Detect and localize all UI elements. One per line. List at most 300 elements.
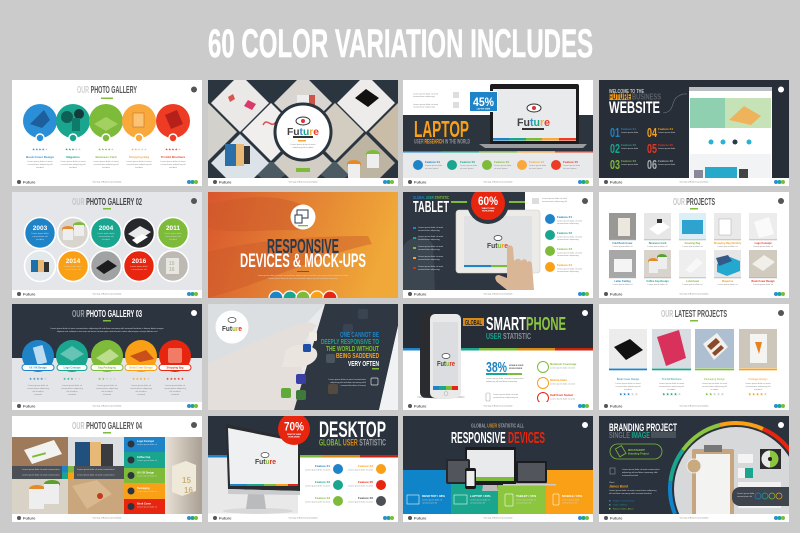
future business line: FUTURE xyxy=(609,92,631,102)
pills xyxy=(22,364,191,370)
panel: our photo gallery xyxy=(12,80,202,186)
features: Lorem ipsum dolor sit amet xyxy=(348,500,373,504)
footer xyxy=(17,180,198,184)
years: 2003 xyxy=(33,225,48,232)
phone mock-up: Future xyxy=(437,361,455,368)
years: 2004 xyxy=(99,225,114,232)
global tag xyxy=(463,318,484,327)
project captions: Lorem ipsum dolor sit xyxy=(648,283,668,286)
colour strip xyxy=(403,348,593,350)
device captions: DESKTOP / 38% xyxy=(422,494,445,498)
device captions: LAPTOP / 26% xyxy=(470,494,491,498)
project text: consectetuer adipiscing elit xyxy=(702,385,727,388)
item text: tincidunt xyxy=(135,166,143,169)
footer: Your logo of Business presentation xyxy=(483,292,513,296)
divider xyxy=(297,271,309,272)
device icon xyxy=(290,204,316,230)
bullet list: consectetuer adipiscing xyxy=(418,238,441,241)
item text: consectetuer adipiscing xyxy=(96,387,119,390)
green connectors xyxy=(451,201,525,203)
bullet list: Lorem ipsum dolor sit amet xyxy=(418,235,443,238)
footer: Future xyxy=(23,292,36,296)
item text: tincidunt xyxy=(36,166,44,169)
close button xyxy=(582,422,588,428)
footer: Your logo of Business presentation xyxy=(92,292,122,296)
bullet list: Lorem ipsum dolor sit amet xyxy=(418,265,443,268)
numbered features xyxy=(610,128,657,169)
features: Lorem ipsum dolor sit amet xyxy=(557,252,582,254)
year text: tincidunt xyxy=(169,238,177,241)
features: consectetuer adipiscing xyxy=(557,254,580,257)
project captions: Lorem ipsum dolor sit xyxy=(683,245,703,248)
sub text xyxy=(258,274,349,280)
contact: Twitter: @Name xyxy=(613,504,628,506)
year text: Lorem ipsum dolor xyxy=(64,265,82,268)
project text: Lorem ipsum dolor sit amet xyxy=(702,382,727,385)
footer: Your logo of Business presentation xyxy=(679,404,709,408)
item text: euismod xyxy=(34,394,43,396)
project text: Lorem ipsum dolor sit amet xyxy=(615,382,641,385)
item text: consectetuer adipiscing xyxy=(61,387,84,390)
dark band xyxy=(403,304,593,348)
item text xyxy=(27,384,187,396)
intro text xyxy=(50,327,164,333)
year text: consectetuer elit xyxy=(65,268,81,271)
panel: tablet xyxy=(403,182,593,298)
item text: Lorem ipsum dolor sit xyxy=(131,384,151,387)
features: consectetuer adipiscing xyxy=(557,238,580,241)
client xyxy=(609,481,657,495)
monitor mock-up xyxy=(223,424,300,514)
ratings: ★★★★★ xyxy=(32,148,49,152)
desktop heading: DESKTOP xyxy=(319,417,386,442)
item labels: Book Cover Design xyxy=(26,155,54,159)
thumbnail bases xyxy=(609,240,777,278)
bullet list: consectetuer adipiscing xyxy=(418,248,441,251)
footer: Your logo of Business presentation xyxy=(679,516,709,520)
ratings: ★★★★★ xyxy=(165,148,182,152)
colour stack: Coffee Cup xyxy=(137,456,151,459)
footer: Future xyxy=(23,516,36,520)
year text: tincidunt xyxy=(36,238,44,241)
feature text: Feature 05 xyxy=(658,143,673,147)
item text: Lorem ipsum dolor sit xyxy=(28,384,48,387)
ratings xyxy=(32,148,180,150)
pill labels: Bag Packaging xyxy=(98,366,116,370)
laptop heading: LAPTOP xyxy=(414,116,469,142)
ring and mock-ups: Lorem ipsum dolor xyxy=(737,492,755,495)
feature text: Feature 01 xyxy=(621,127,636,131)
footer: Your logo of Business presentation xyxy=(92,516,122,520)
device captions: TABLET / 15% xyxy=(516,494,536,498)
feature text: Lorem ipsum dolor xyxy=(658,163,676,166)
quote: DEEPLY RESPONSIVE TO xyxy=(321,337,379,346)
top notes: Lorem ipsum dolor sit amet xyxy=(413,103,438,106)
top notes: consectetuer adipiscing xyxy=(413,95,436,98)
note icon xyxy=(371,378,378,385)
note xyxy=(610,468,660,477)
panel: our latest projects xyxy=(599,304,789,410)
sub-heading: SINGLE IMAGE xyxy=(609,431,650,440)
item text: elit tincidunt xyxy=(33,390,44,393)
project text: Lorem ipsum dolor sit amet xyxy=(745,382,771,385)
item text: consectetuer adipiscing xyxy=(27,387,50,390)
item text: elit tincidunt xyxy=(67,390,78,393)
red 70% badge: WORLDWIDE xyxy=(288,436,301,438)
footer xyxy=(12,514,202,522)
footer: Your logo of Business presentation xyxy=(483,516,513,520)
features xyxy=(545,214,582,273)
tablet mock-up xyxy=(456,210,540,273)
footer: Your logo of Business presentation xyxy=(288,180,318,184)
red 60% badge xyxy=(467,182,509,224)
sub-heading: GLOBAL USER STATISTIC xyxy=(319,438,386,448)
lower band xyxy=(403,152,593,179)
project captions: Lorem ipsum dolor sit xyxy=(683,283,703,286)
photo tiles: 16 xyxy=(184,486,193,495)
device captions: MOBILE / 08% xyxy=(562,494,583,498)
features: Lorem ipsum dolor sit amet xyxy=(557,220,582,222)
feature row: sit amet ipsum xyxy=(529,167,543,170)
colour dots xyxy=(103,320,111,322)
stats list: Mobile Data xyxy=(550,378,567,382)
footer xyxy=(403,178,593,184)
38% stat: 38% xyxy=(486,359,507,376)
footer xyxy=(599,178,789,186)
item text: elit tincidunt xyxy=(102,390,113,393)
item text: consectetuer adipiscing xyxy=(130,387,153,390)
heading: OUR PHOTO GALLERY xyxy=(77,85,137,96)
project captions: Lorem ipsum dolor sit xyxy=(753,245,773,248)
tablet heading: TABLET xyxy=(413,199,449,216)
tile contents xyxy=(225,89,380,178)
project text: consectetuer adipiscing elit xyxy=(746,385,771,388)
bullet list: Lorem ipsum dolor sit amet xyxy=(418,255,443,258)
feature row: Lorem ipsum dolor xyxy=(460,164,478,167)
features: Feature 02 xyxy=(315,480,330,484)
item text: Lorem ipsum dolor sit xyxy=(62,384,82,387)
feature text: Lorem ipsum dolor xyxy=(621,147,639,150)
footer: Your logo of Business presentation xyxy=(679,292,709,296)
badge 45%: LAPTOP USER xyxy=(477,108,491,110)
feature text: Lorem ipsum dolor xyxy=(658,147,676,150)
logo disc xyxy=(275,104,331,160)
numbered features: 04 xyxy=(647,125,658,140)
feature row: Lorem ipsum dolor xyxy=(529,164,547,167)
features: Lorem ipsum dolor sit amet xyxy=(557,236,582,238)
item text: Lorem ipsum dolor sit xyxy=(165,384,185,387)
quote: BEING SADDENED xyxy=(336,351,379,360)
item text: elit tincidunt xyxy=(136,390,147,393)
dark left panel xyxy=(403,192,525,290)
38% stat: MOBILE USER xyxy=(509,365,524,367)
dark band xyxy=(208,416,398,455)
caption strip xyxy=(12,466,124,479)
close button xyxy=(778,310,784,316)
ratings: ★★★★★ xyxy=(29,377,48,381)
years: 2016 xyxy=(132,258,147,265)
close button xyxy=(191,422,197,428)
circle images: 16 xyxy=(169,267,175,273)
item text: tincidunt xyxy=(102,166,110,169)
laptop mock-up: Future xyxy=(517,117,550,129)
item text: euismod xyxy=(137,394,146,396)
project captions: Lorem ipsum dolor sit xyxy=(613,245,633,248)
feature row: Lorem ipsum dolor xyxy=(563,164,581,167)
year text: tincidunt xyxy=(102,238,110,241)
colour stack: Logo Concept xyxy=(137,440,154,443)
features: Lorem ipsum dolor sit amet xyxy=(305,484,330,488)
item text: Lorem ipsum dolor sit xyxy=(97,384,117,387)
image circles xyxy=(22,340,191,372)
red 60% badge: TABLET USER xyxy=(481,207,495,210)
device captions: consectetuer elit xyxy=(470,502,486,504)
item text: Lorem ipsum dolor sit amet xyxy=(60,160,86,163)
item text: euismod xyxy=(171,394,180,396)
hand shape xyxy=(208,197,372,298)
item text: consectetuer adipiscing elit xyxy=(61,163,86,166)
client: Client xyxy=(609,481,615,484)
dark top xyxy=(12,304,202,358)
footer: Your logo of Business presentation xyxy=(92,404,122,408)
project text: tincidunt xyxy=(754,388,762,391)
year text: Lorem ipsum dolor xyxy=(130,265,148,268)
footer: Future xyxy=(610,292,623,296)
colour stack xyxy=(124,437,165,514)
red 70% badge: DESKTOP USER xyxy=(287,434,302,436)
project labels: Book Cover Design xyxy=(617,377,640,381)
note: euismod tincidunt xyxy=(622,474,639,477)
colour bars xyxy=(609,368,777,370)
quote xyxy=(321,330,379,368)
years xyxy=(33,225,180,265)
phone photo wedge xyxy=(294,304,398,410)
device captions: consectetuer elit xyxy=(562,502,578,504)
photo tiles xyxy=(12,437,202,514)
logo disc: Future xyxy=(287,127,319,138)
feature text xyxy=(621,127,676,166)
sub text: Lorem ipsum dolor sit amet consectetuer adipiscing elit sed diam nonummy xyxy=(268,277,339,280)
caption strip: Lorem ipsum dolor sit amet consectetuer xyxy=(22,474,60,476)
device captions: Lorem ipsum dolor sit xyxy=(422,498,442,502)
footer xyxy=(403,514,593,522)
colour stack: Lorem ipsum dolor sit xyxy=(137,443,157,446)
project labels: Business Card xyxy=(649,242,667,245)
38% stat: WORLDWIDE xyxy=(509,368,523,370)
stats list: Lorem ipsum dolor sit amet xyxy=(550,382,575,386)
year text xyxy=(31,232,182,271)
pill labels: Logo Concept xyxy=(64,366,81,370)
project captions: Lorem ipsum dolor sit xyxy=(613,283,633,286)
bullet list xyxy=(413,226,443,271)
years: 2014 xyxy=(66,258,81,265)
close button xyxy=(778,422,784,428)
welcome text: WELCOME TO THE xyxy=(609,89,644,95)
panel: responsive devices xyxy=(403,416,593,522)
pill labels: Book Cover Design xyxy=(129,366,153,370)
note: adipiscing elit sed diam nonummy nibh xyxy=(622,471,659,474)
sub text: Lorem ipsum dolor sit amet consectetuer adipiscing elit sed diam nonummy nibh euismod tincidunt xyxy=(258,274,349,277)
panel: diamond mock-up gallery xyxy=(208,80,398,186)
colour stack: UI / UX Design xyxy=(137,472,155,474)
numbered features: 03 xyxy=(610,157,620,172)
photo tiles: 15 xyxy=(182,476,191,485)
project labels: Fold Book Cover xyxy=(612,242,633,245)
circle images: 15 xyxy=(169,261,175,267)
panel: our projects xyxy=(599,192,789,298)
item labels: Shopping Bag xyxy=(129,155,149,159)
footer xyxy=(208,178,398,186)
year text: Lorem ipsum dolor xyxy=(164,232,182,235)
stats list: Network Coverage xyxy=(550,362,577,366)
colour stack: Lorem ipsum dolor sit xyxy=(137,474,157,478)
devices heading: DEVICES & MOCK-UPS xyxy=(240,251,366,272)
item text: Lorem ipsum dolor sit amet xyxy=(160,160,186,163)
project labels: Coffee Cup Design xyxy=(646,280,669,283)
feature row: sit amet ipsum xyxy=(563,167,577,170)
heading: OUR PHOTO GALLERY 04 xyxy=(72,421,142,432)
item text: consectetuer adipiscing elit xyxy=(127,163,152,166)
bullet list: Lorem ipsum dolor sit amet xyxy=(418,226,443,229)
intro text: Lorem ipsum dolor sit amet consectetuer adipiscing elit sed diam nonummy nibh euismod tincidunt ut laoreet dolore magna xyxy=(50,327,164,330)
ring and mock-ups: consectetuer elit xyxy=(737,495,753,498)
item text: Lorem ipsum dolor sit amet xyxy=(93,160,119,163)
features xyxy=(305,464,386,506)
footer: Your logo of Business presentation xyxy=(483,180,513,184)
38% stat xyxy=(486,359,524,383)
features: consectetuer adipiscing xyxy=(557,270,580,273)
item text: consectetuer adipiscing xyxy=(164,387,187,390)
project labels: Book Cover Design xyxy=(751,280,775,283)
footer: Future xyxy=(610,516,623,520)
future business line xyxy=(609,94,661,100)
circle images xyxy=(31,222,179,274)
quote: THE WORLD WITHOUT xyxy=(326,344,379,353)
project labels: Magazine xyxy=(722,280,734,283)
project text: tincidunt xyxy=(668,388,676,391)
feature text: Lorem ipsum dolor xyxy=(621,163,639,166)
features: Lorem ipsum dolor sit amet xyxy=(305,468,330,472)
footer: Future xyxy=(414,516,427,520)
arrow to browser xyxy=(663,94,687,113)
38% stat: Lorem ipsum dolor sit amet consectetuer xyxy=(486,377,524,380)
item text: consectetuer adipiscing elit xyxy=(161,163,186,166)
colour dots xyxy=(103,432,111,434)
item labels: Tri-fold Brochure xyxy=(161,155,185,159)
close button xyxy=(582,198,588,204)
finger over phone xyxy=(282,345,317,367)
project text: Lorem ipsum dolor sit amet xyxy=(659,382,684,385)
note text xyxy=(328,378,367,387)
phone note xyxy=(486,393,518,401)
device captions: consectetuer elit xyxy=(516,502,532,504)
contact: Behance Name, Album xyxy=(613,508,634,510)
features: Lorem ipsum dolor sit amet xyxy=(348,484,373,488)
project captions xyxy=(613,245,773,286)
device captions: Lorem ipsum dolor xyxy=(562,498,580,502)
hand xyxy=(495,245,534,290)
ratings: ★★★★★ xyxy=(166,377,185,381)
project captions: Lorem ipsum dolor sit xyxy=(718,283,738,286)
close button xyxy=(582,310,588,316)
feature row xyxy=(413,160,581,170)
bullet list: Lorem ipsum dolor sit amet xyxy=(418,245,443,248)
phone mock-up xyxy=(417,311,465,398)
year text: consectetuer elit xyxy=(32,235,48,238)
user statistic: USER STATISTIC xyxy=(486,332,531,341)
stats list: Call from Social xyxy=(550,393,573,397)
panel: photo gallery 04 xyxy=(12,416,202,522)
features: consectetuer adipiscing xyxy=(557,222,580,225)
project labels: Logo Concept xyxy=(755,242,772,245)
dark band xyxy=(403,115,593,151)
colour blocks xyxy=(403,470,593,514)
note text: adipiscing elit sed diam nonummy nibh xyxy=(330,381,367,384)
app icons xyxy=(281,309,368,400)
close button xyxy=(191,310,197,316)
top notes: consectetuer adipiscing xyxy=(413,106,436,108)
features: Feature 03 xyxy=(557,247,572,251)
features: Lorem ipsum dolor sit amet xyxy=(348,468,373,472)
project pill xyxy=(610,444,662,459)
38% stat: adipiscing elit sed diam nonummy xyxy=(486,380,518,383)
project labels: Shopping Bag Monthly xyxy=(714,242,742,245)
logo disc: adipiscing elit tincidunt xyxy=(293,146,314,149)
client: elit sed diam nonummy nibh euismod tincidunt xyxy=(609,492,652,495)
panel: photo gallery 03 xyxy=(12,304,202,410)
bullet list: consectetuer adipiscing xyxy=(418,229,441,232)
features: Feature 05 xyxy=(358,480,373,484)
red 70% badge xyxy=(278,413,310,445)
diamond tiles xyxy=(208,80,398,178)
footer: Future xyxy=(23,180,36,184)
ratings: ★★★★★ xyxy=(131,148,148,152)
numbered features: 06 xyxy=(647,157,657,172)
project labels: Packaging Design xyxy=(704,377,726,381)
footer: Future xyxy=(414,404,427,408)
close button xyxy=(778,86,784,92)
browser mock-up xyxy=(689,87,772,178)
item text xyxy=(28,160,186,168)
badge 45% xyxy=(469,91,498,112)
colour stack: Lorem ipsum dolor sit xyxy=(137,459,157,462)
feature row: Feature 03 xyxy=(494,160,509,164)
contact: Website: YourSite.Name xyxy=(613,500,636,502)
note text: euismod tincidunt ut laoreet xyxy=(341,384,366,387)
note: Lorem ipsum dolor sit amet consectetuer xyxy=(622,468,660,471)
quote: VERY OFTEN xyxy=(348,359,379,368)
edge strip xyxy=(379,326,398,410)
numbered features: 05 xyxy=(647,141,657,156)
pill labels: Shopping Bag xyxy=(167,366,184,370)
timeline circles xyxy=(24,218,188,282)
item text: Lorem ipsum dolor sit amet xyxy=(27,160,53,163)
item text: tincidunt xyxy=(169,166,177,169)
colour dots xyxy=(103,208,111,210)
colour stack: Book Cover xyxy=(137,502,151,506)
footer: Your logo of Business presentation xyxy=(92,180,122,184)
website heading: WEBSITE xyxy=(609,98,660,117)
ratings xyxy=(29,377,185,381)
bullet list: consectetuer adipiscing xyxy=(418,268,441,271)
ratings: ★★★★★ xyxy=(705,392,725,396)
ring and mock-ups xyxy=(670,423,798,533)
footer: Your logo of Business presentation xyxy=(679,180,709,184)
panel: desktop xyxy=(208,413,398,522)
project text: consectetuer adipiscing elit xyxy=(659,385,684,388)
quote: ONE CANNOT BE xyxy=(340,330,379,339)
panel: responsive devices and mock-ups xyxy=(208,192,398,305)
